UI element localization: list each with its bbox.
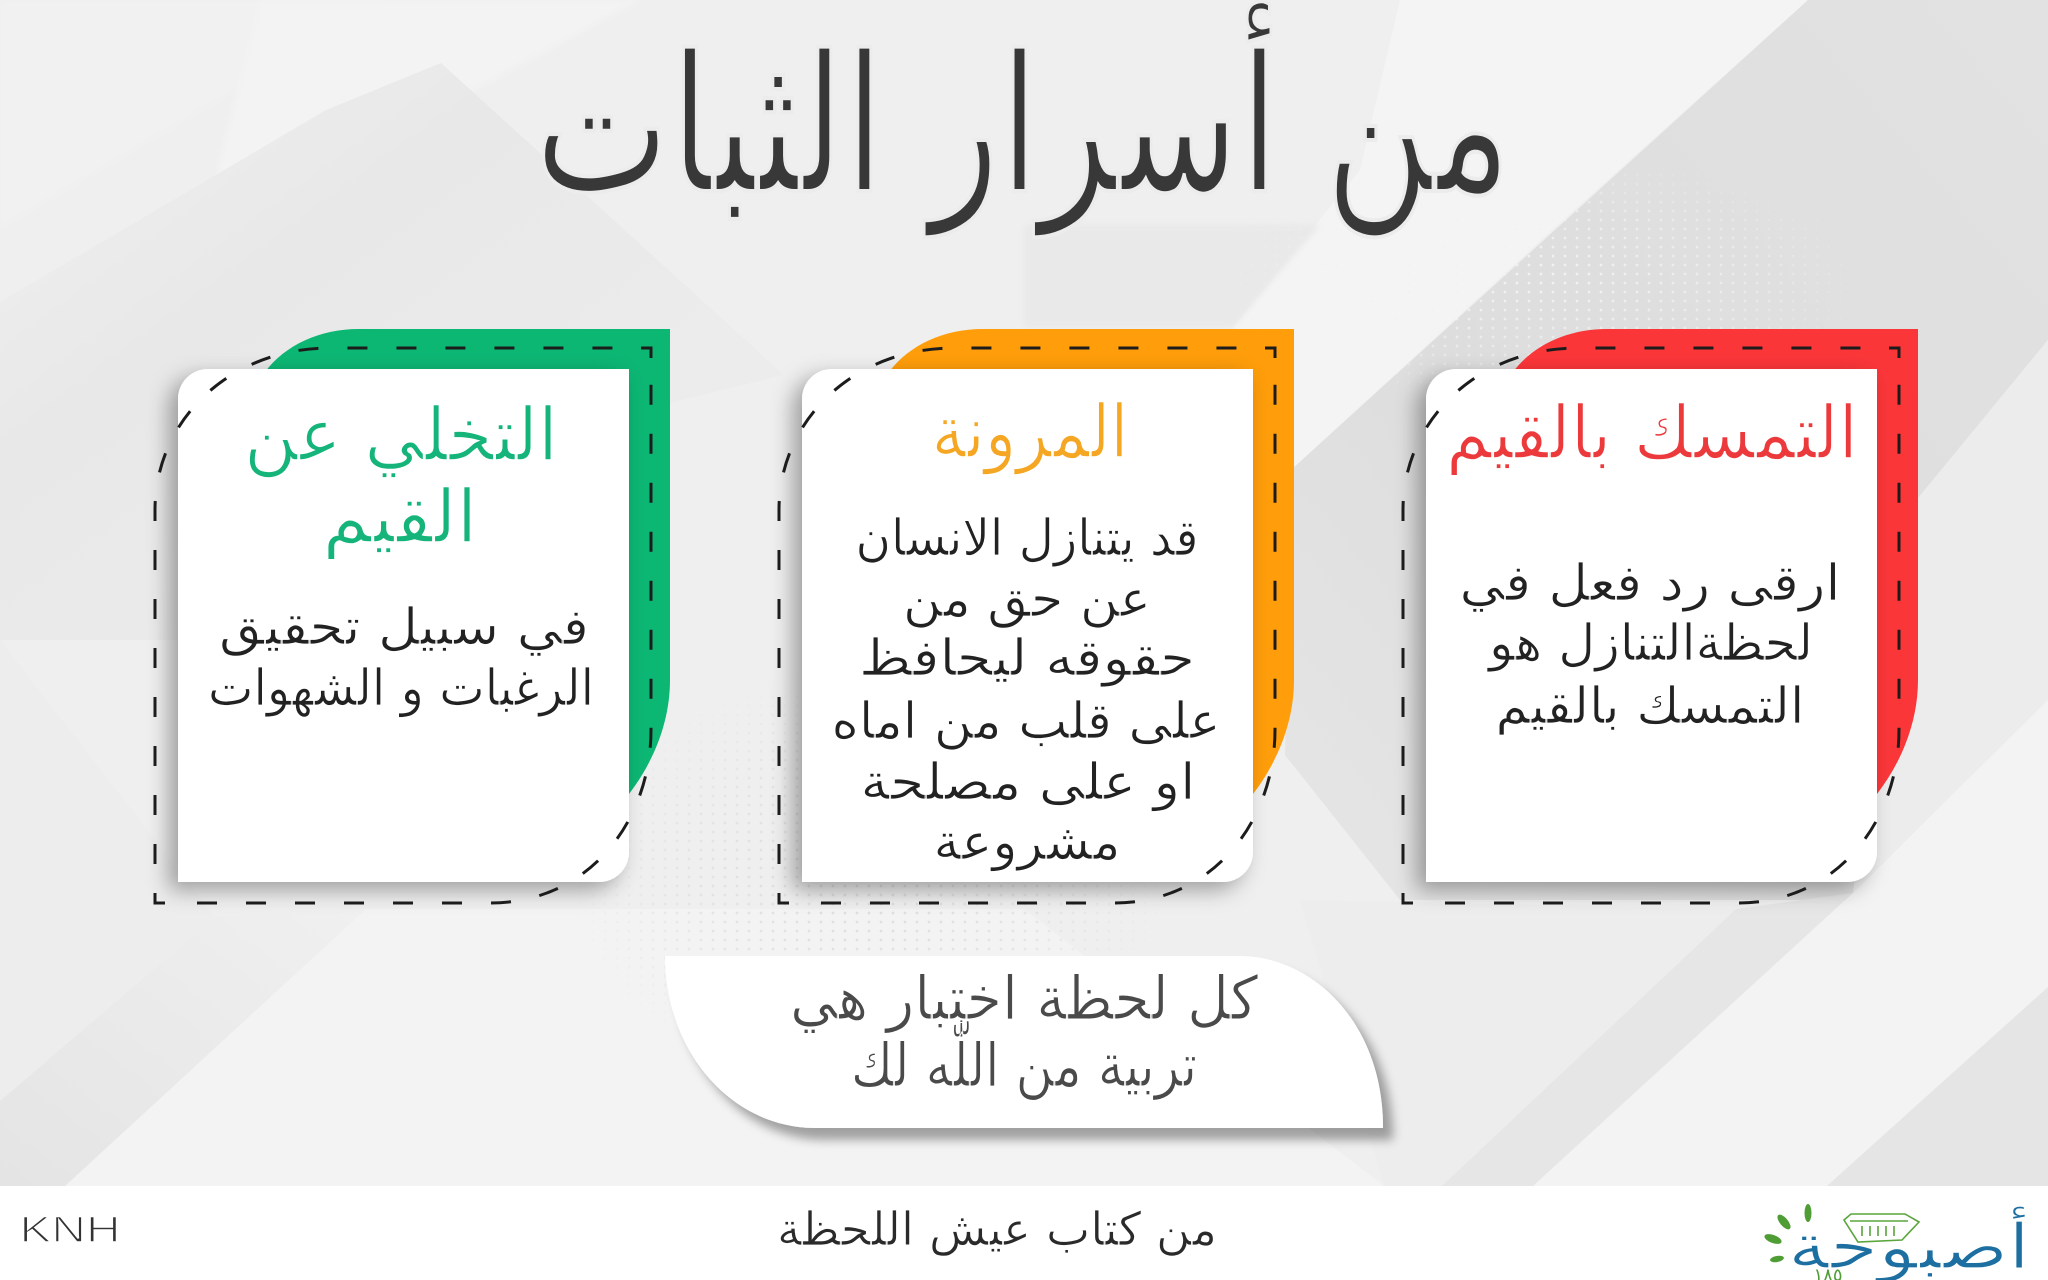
card body: green: الرغبات و الشهوات (208, 659, 594, 718)
signature KNH: KNH (20, 1209, 120, 1250)
back shape: green (265, 329, 670, 794)
dashed outline: orange (779, 348, 1275, 903)
card heading: green: التخلي عن (244, 393, 558, 478)
logo (1763, 1204, 2030, 1280)
dashed outline: green (155, 348, 651, 903)
panel: orange card (779, 329, 1294, 903)
card heading: red: التمسك بالقيم (1446, 391, 1858, 476)
title: من أسرار الثبات (534, 1, 1512, 238)
card body: orange: او على مصلحة (860, 753, 1196, 812)
callout text (790, 964, 1258, 1101)
card heading: green: القيم (322, 475, 478, 560)
card heading: green (244, 393, 558, 560)
card body: red: ارقى رد فعل في (1460, 554, 1840, 612)
panel: green card (155, 329, 670, 903)
card heading: orange: المرونة (932, 390, 1128, 475)
card body: orange (832, 509, 1220, 872)
back shape: orange (889, 329, 1294, 794)
callout text: كل لحظة اختبار هي (790, 964, 1258, 1034)
icon: building (1844, 1214, 1919, 1242)
dashed outline: red (1403, 348, 1899, 903)
card body: red (1460, 554, 1840, 735)
card body: orange: على قلب من اماه (832, 692, 1220, 750)
back shape: red (1513, 329, 1918, 794)
card body: orange: مشروعة (934, 813, 1120, 872)
callout shape (665, 956, 1383, 1128)
callout (665, 956, 1383, 1128)
card body: green (208, 598, 594, 718)
card body: red: التمسك بالقيم (1496, 677, 1804, 735)
footer source text: من كتاب عيش اللحظة (777, 1202, 1217, 1257)
panel: red card (1403, 329, 1918, 903)
white card: red (1426, 369, 1877, 882)
card body: red: لحظةالتنازل هو (1486, 614, 1813, 672)
icon: leaves (1763, 1204, 1812, 1263)
card body: orange: حقوقه ليحافظ (859, 629, 1195, 687)
footer bar (0, 1186, 2048, 1280)
callout text: تربية من اللّٰه لك (851, 1019, 1197, 1101)
white card: orange (802, 369, 1253, 882)
card body: green: في سبيل تحقيق (219, 598, 589, 656)
white card: green (178, 369, 629, 882)
card body: orange: عن حق من (903, 570, 1151, 628)
card body: orange: قد يتنازل الانسان (856, 509, 1198, 567)
